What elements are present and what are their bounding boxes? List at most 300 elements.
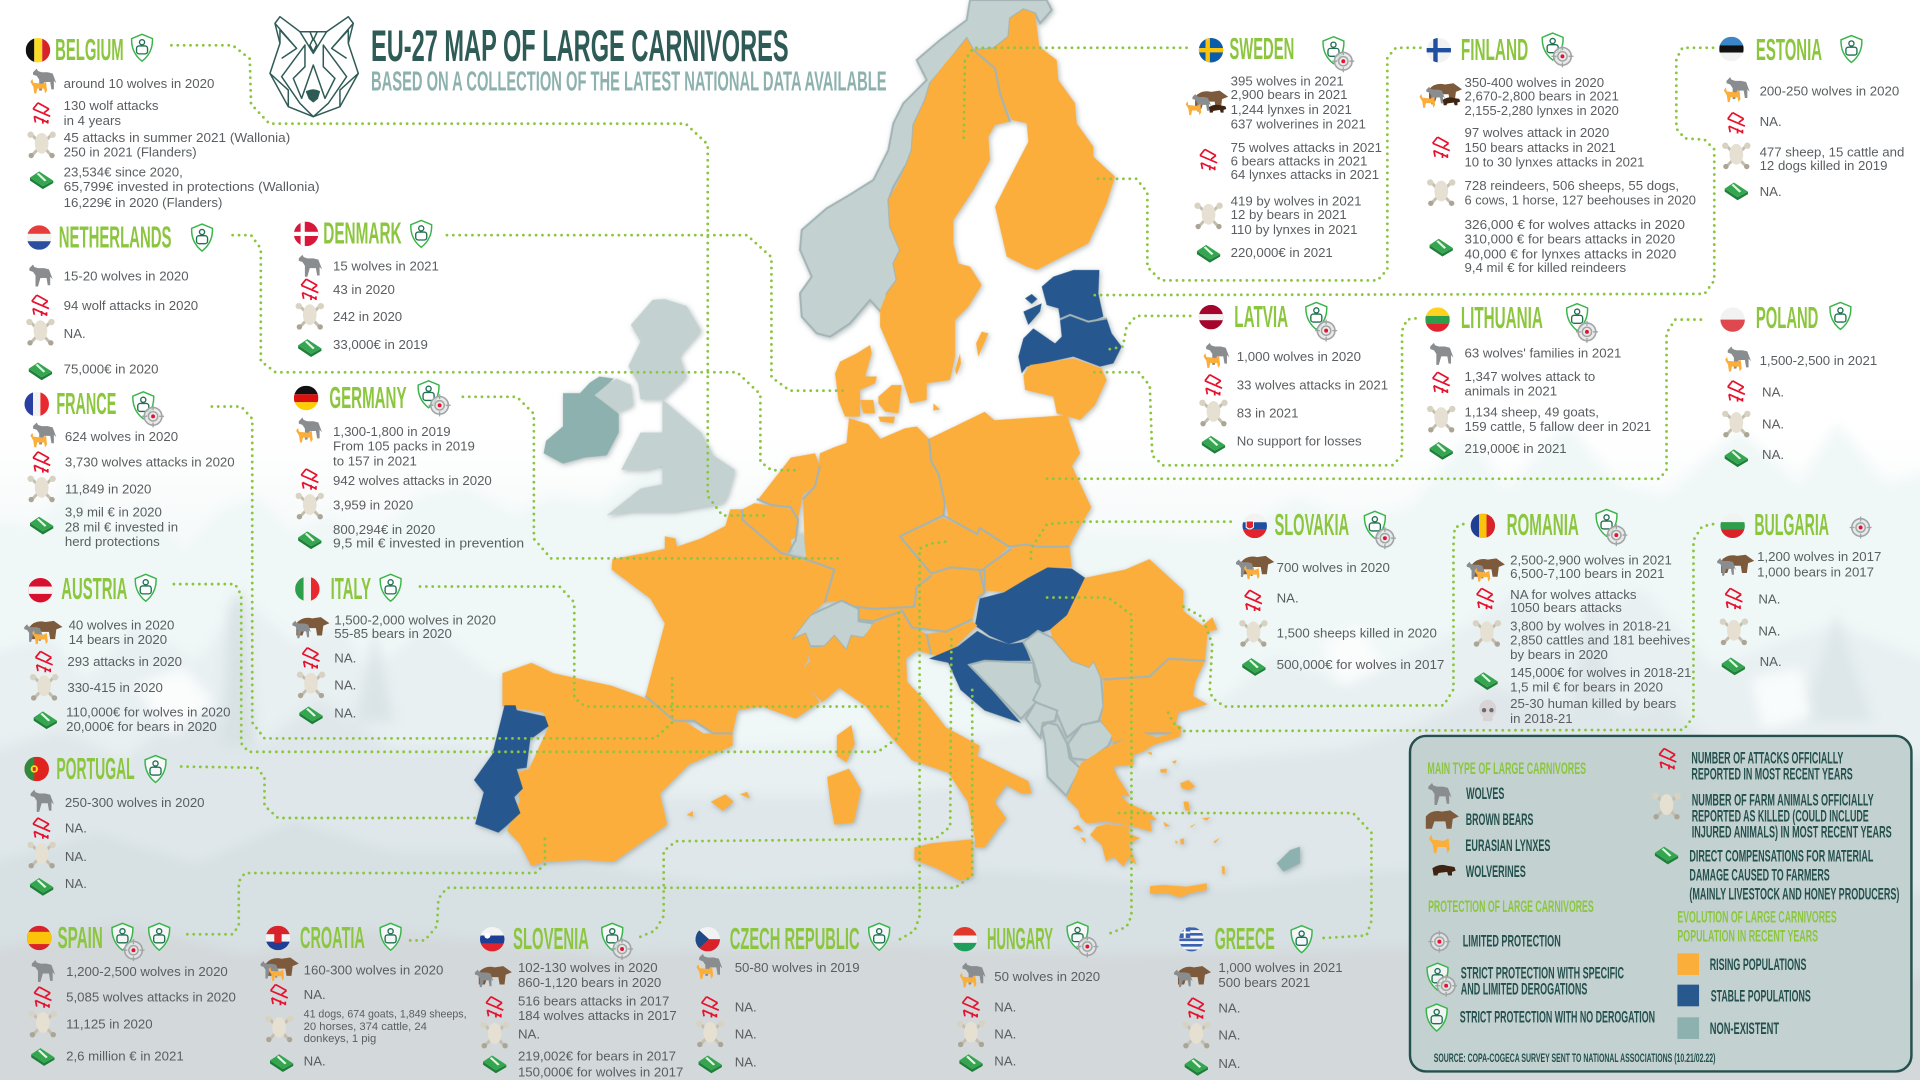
- compensation: NA.: [994, 1053, 1016, 1068]
- panel: Slovenia: SLOVENIA: [513, 922, 589, 956]
- killed animals: [30, 674, 163, 701]
- panel: Lithuania: [1425, 301, 1651, 460]
- panel: Spain: [27, 921, 236, 1066]
- panel: Latvia: LATVIA: [1234, 300, 1288, 334]
- compensation: NA.: [735, 1055, 757, 1070]
- wolves: to 157 in 2021: [333, 453, 417, 468]
- legend text: [1427, 750, 1899, 1065]
- compensation: 9,5 mil € invested in prevention: [333, 535, 524, 550]
- Spain: [502, 663, 750, 866]
- Portugal: [474, 705, 549, 833]
- killed animals: 159 cattle, 5 fallow deer in 2021: [1464, 419, 1651, 434]
- protection types: LIMITED PROTECTION: [1463, 933, 1561, 951]
- attacks: [1205, 375, 1388, 396]
- Estonia: [1023, 270, 1103, 325]
- wolves: [1724, 77, 1899, 102]
- flag: [24, 757, 49, 781]
- icon: strict protection: [1426, 1004, 1447, 1031]
- attacks: [1188, 998, 1240, 1019]
- carnivore types: WOLVERINES: [1466, 863, 1526, 881]
- attacks: 184 wolves attacks in 2017: [518, 1008, 677, 1023]
- panel: Portugal: [24, 752, 205, 896]
- wolves and bears: 55-85 bears in 2020: [334, 626, 452, 641]
- flag: [1720, 514, 1745, 538]
- killed animals: NA.: [334, 677, 356, 692]
- Serbia: [1023, 631, 1103, 737]
- Northern Ireland: [594, 379, 633, 412]
- flag: [294, 222, 318, 246]
- panel: Italy: [292, 572, 496, 724]
- attacks: 130 wolf attacks: [64, 98, 159, 113]
- killed animals: NA.: [994, 1026, 1016, 1041]
- wolves: [30, 422, 178, 447]
- attacks: 6 bears attacks in 2021: [1231, 153, 1367, 168]
- compensation: [270, 1053, 326, 1072]
- Ireland: [544, 377, 619, 464]
- protection: [1596, 509, 1627, 546]
- border: Sweden / Finland: [973, 50, 1010, 122]
- compensation: NA.: [65, 876, 87, 891]
- protection: [112, 923, 170, 961]
- icon: wolves: [1428, 783, 1452, 805]
- compensation: [1430, 441, 1567, 460]
- panel: Belgium: BELGIUM: [55, 33, 124, 67]
- wolves: [29, 264, 189, 287]
- killed animals: NA.: [1758, 624, 1780, 639]
- panel: Italy: ITALY: [331, 572, 371, 606]
- compensation: [1430, 217, 1685, 275]
- killed animals: NA.: [1218, 1028, 1240, 1043]
- attacks: 10 to 30 lynxes attacks in 2021: [1464, 155, 1644, 170]
- attacks: [702, 997, 757, 1018]
- France: [611, 509, 834, 733]
- logo: wolf head: [270, 17, 358, 117]
- wolves and bears: [1717, 549, 1881, 579]
- attacks: [1433, 369, 1595, 399]
- compensation: [31, 1048, 184, 1066]
- killed animals: [27, 842, 87, 868]
- compensation: 326,000 € for wolves attacks in 2020: [1464, 217, 1685, 232]
- Albania: [1042, 723, 1081, 796]
- panel: Poland: POLAND: [1756, 301, 1818, 335]
- killed animals: 45 attacks in summer 2021 (Wallonia): [64, 130, 290, 145]
- attacks: 94 wolf attacks in 2020: [64, 298, 198, 313]
- killed animals: [27, 476, 151, 502]
- protection: [602, 923, 633, 960]
- compensation: [30, 164, 320, 210]
- compensation: 800,294€ in 2020: [333, 522, 435, 537]
- protection: [1067, 922, 1098, 958]
- flag: [1720, 307, 1745, 332]
- compensation: 28 mil € invested in: [65, 519, 178, 534]
- Greece: [1067, 723, 1225, 897]
- protection types: [1428, 898, 1655, 1027]
- Switzerland: [791, 601, 873, 650]
- killed animals: donkeys, 1 pig: [304, 1033, 376, 1045]
- panel: Austria: [24, 572, 230, 734]
- killed animals: NA.: [64, 326, 86, 341]
- Slovakia: [980, 545, 1072, 592]
- killed animals: [297, 672, 356, 698]
- flag: [1471, 514, 1495, 538]
- panel: Estonia: ESTONIA: [1756, 33, 1822, 67]
- Lithuania: [1023, 358, 1107, 420]
- panel: Netherlands: [26, 220, 212, 380]
- killed animals: 6 cows, 1 horse, 127 beehouses in 2020: [1464, 192, 1696, 207]
- wolves and bears: 1,200 wolves in 2017: [1757, 549, 1881, 564]
- legend panel: [1410, 736, 1911, 1071]
- wolves: [32, 960, 228, 982]
- wolves: [296, 418, 475, 468]
- compensation: 65,799€ invested in protections (Wallonia): [64, 179, 320, 194]
- Czech Republic: [900, 518, 1009, 576]
- wolves and bears: [475, 960, 661, 990]
- panel: Romania: [1467, 508, 1691, 726]
- compensation: 16,229€ in 2020 (Flanders): [64, 195, 222, 210]
- wolves: 250-300 wolves in 2020: [65, 795, 205, 810]
- flag: [1242, 514, 1267, 538]
- compensation: No support for losses: [1237, 434, 1362, 449]
- wolves: 1,300-1,800 in 2019: [333, 424, 451, 439]
- killed animals: NA.: [518, 1026, 540, 1041]
- panel: Slovakia: SLOVAKIA: [1274, 508, 1349, 542]
- carnivore numbers: 2,900 bears in 2021: [1231, 87, 1347, 102]
- protection: [132, 34, 152, 61]
- attacks: NA.: [735, 999, 757, 1014]
- compensation: 219,000€ in 2021: [1464, 441, 1567, 456]
- carnivore numbers: 350-400 wolves in 2020: [1464, 75, 1604, 90]
- flag: [27, 926, 51, 950]
- compensation: [34, 704, 230, 734]
- wolves and bears: 860-1,120 bears in 2020: [518, 975, 661, 990]
- attacks: 942 wolves attacks in 2020: [333, 473, 492, 488]
- killed animals: 242 in 2020: [333, 309, 402, 324]
- protection types: STRICT PROTECTION WITH NO DEROGATION: [1460, 1009, 1655, 1027]
- Denmark: [835, 345, 940, 423]
- attacks: NA.: [65, 821, 87, 836]
- population evolution: RISING POPULATIONS: [1710, 956, 1806, 974]
- carnivore numbers: 395 wolves in 2021: [1231, 74, 1344, 89]
- compensation: 110,000€ for wolves in 2020: [66, 704, 230, 719]
- wolves and bears: 1,000 wolves in 2021: [1218, 960, 1343, 975]
- panel: Germany: GERMANY: [329, 381, 407, 415]
- panel: Lithuania: LITHUANIA: [1461, 301, 1543, 335]
- carnivore numbers: [1419, 75, 1619, 118]
- killed animals: 250 in 2021 (Flanders): [64, 145, 197, 160]
- compensation: NA.: [304, 1053, 326, 1068]
- panel: Greece: GREECE: [1215, 922, 1275, 956]
- attacks: [486, 993, 677, 1023]
- killed animals: 1,500 sheeps killed in 2020: [1277, 625, 1437, 640]
- wolves: 15 wolves in 2021: [333, 259, 439, 274]
- compensation: NA.: [1760, 184, 1782, 199]
- Sweden: [880, 38, 1010, 403]
- attacks: NA.: [1762, 385, 1784, 400]
- attacks: [1245, 590, 1299, 611]
- attacks: 75 wolves attacks in 2021: [1231, 140, 1382, 155]
- killed animals: [29, 1011, 153, 1037]
- killed animals: [1722, 411, 1784, 437]
- wolves: 63 wolves' families in 2021: [1464, 346, 1621, 361]
- flag: [696, 927, 720, 951]
- protection: [418, 381, 451, 416]
- compensation: [699, 1055, 757, 1073]
- icon: brown bears: [1426, 810, 1459, 829]
- compensation: NA.: [1760, 654, 1782, 669]
- wolves and bears: 500 bears 2021: [1218, 975, 1310, 990]
- panel: Bulgaria: BULGARIA: [1754, 508, 1829, 542]
- wolves and bears: [292, 612, 496, 641]
- protection: [1323, 37, 1354, 72]
- wolves: [1430, 343, 1621, 365]
- Bosnia: [969, 661, 1040, 719]
- compensation: [298, 522, 524, 550]
- attacks: 64 lynxes attacks in 2021: [1231, 167, 1379, 182]
- compensation: [29, 361, 159, 380]
- killed animals: NA.: [735, 1026, 757, 1041]
- attacks: NA.: [304, 987, 326, 1002]
- protection: [1830, 302, 1851, 329]
- carnivore numbers: [1186, 74, 1366, 132]
- country borders: [645, 439, 1205, 744]
- killed animals: [1427, 178, 1696, 207]
- compensation: 500,000€ for wolves in 2017: [1277, 657, 1444, 672]
- panel: Croatia: [261, 921, 467, 1072]
- panel: Slovenia: [475, 922, 683, 1079]
- carnivore types: [1427, 760, 1586, 881]
- attacks: NA.: [1758, 592, 1780, 607]
- protection: [411, 220, 432, 247]
- panel: Sweden: SWEDEN: [1229, 32, 1294, 66]
- protection: [192, 224, 212, 251]
- wolves: 1,500-2,500 in 2021: [1760, 353, 1877, 368]
- wolves and bears: 14 bears in 2020: [69, 632, 167, 647]
- killed animals: 83 in 2021: [1237, 406, 1298, 421]
- panel: Latvia: [1199, 300, 1388, 454]
- flag: [1719, 37, 1744, 61]
- compensation: [299, 706, 356, 724]
- attacks: [1728, 381, 1784, 402]
- wolves: 624 wolves in 2020: [65, 429, 178, 444]
- Poland: [929, 412, 1091, 549]
- attacks: [302, 648, 356, 669]
- wolves: [696, 954, 860, 979]
- Great Britain: [607, 299, 735, 516]
- wolves: 200-250 wolves in 2020: [1760, 84, 1899, 99]
- protection: [869, 923, 890, 950]
- attacks: [301, 469, 492, 490]
- panel: Finland: [1419, 33, 1696, 275]
- wolves: [30, 69, 214, 94]
- killed animals: [26, 319, 86, 346]
- protection: [1542, 33, 1573, 67]
- protection: [1850, 516, 1872, 539]
- killed animals: [1473, 619, 1691, 662]
- attacks: NA.: [994, 999, 1016, 1014]
- icon: killed animals: [1652, 793, 1681, 819]
- protection types: PROTECTION OF LARGE CARNIVORES: [1428, 898, 1594, 916]
- wolves: 1,200-2,500 wolves in 2020: [66, 964, 228, 979]
- compensation: [30, 876, 87, 896]
- panel: Greece: [1174, 922, 1343, 1076]
- attacks: 33 wolves attacks in 2021: [1237, 377, 1388, 392]
- killed animals: [1720, 618, 1780, 645]
- compensation: [298, 337, 428, 357]
- Belgium: [742, 503, 798, 553]
- panel: Spain: SPAIN: [58, 921, 103, 955]
- wolves and bears: 160-300 wolves in 2020: [304, 963, 443, 978]
- North Macedonia: [1068, 721, 1113, 760]
- compensation: 219,002€ for bears in 2017: [518, 1048, 676, 1063]
- icon: attacks: [1659, 749, 1676, 769]
- flag: [1199, 305, 1223, 329]
- Finland: [975, 9, 1115, 270]
- killed animals: 11,849 in 2020: [65, 481, 151, 496]
- wolves: [31, 790, 205, 812]
- killed animals: 330-415 in 2020: [67, 680, 163, 695]
- panel: Czech Republic: [696, 922, 890, 1073]
- wolves and bears: 1,000 bears in 2017: [1757, 564, 1874, 579]
- panel: Croatia: CROATIA: [300, 921, 365, 955]
- killed animals: 3,800 by wolves in 2018-21: [1510, 619, 1671, 634]
- wolves: 1,000 wolves in 2020: [1237, 349, 1361, 364]
- attacks: [33, 818, 87, 839]
- protection: [1841, 36, 1862, 62]
- carnivore types: EURASIAN LYNXES: [1465, 837, 1550, 855]
- attacks: 5,085 wolves attacks in 2020: [66, 990, 236, 1005]
- attacks: 43 in 2020: [333, 282, 395, 297]
- killed animals: 110 by lynxes in 2021: [1231, 222, 1358, 237]
- protection: [1364, 511, 1396, 549]
- killed animals: 419 by wolves in 2021: [1231, 194, 1361, 209]
- killed animals: NA.: [65, 849, 87, 864]
- panel: Austria: AUSTRIA: [61, 572, 127, 606]
- icon: skull: [1479, 700, 1496, 721]
- protection: [135, 574, 156, 601]
- attacks: [1477, 587, 1637, 615]
- panel: France: [24, 387, 235, 549]
- wolves: [1236, 556, 1390, 579]
- panel: Romania: ROMANIA: [1507, 508, 1579, 542]
- killed animals: [1722, 143, 1904, 173]
- attacks: [1433, 125, 1644, 170]
- Austria: [859, 567, 985, 632]
- wolves: around 10 wolves in 2020: [64, 76, 214, 91]
- wolves: 50 wolves in 2020: [994, 969, 1100, 984]
- carnivore numbers: 2,155-2,280 lynxes in 2020: [1464, 103, 1619, 118]
- attacks: 1050 bears attacks: [1510, 600, 1622, 615]
- panel: Hungary: [953, 922, 1100, 1072]
- attacks: 516 bears attacks in 2017: [518, 993, 669, 1008]
- killed animals: 41 dogs, 674 goats, 1,849 sheeps,: [304, 1009, 467, 1021]
- attacks: 1,347 wolves attack to: [1464, 369, 1595, 384]
- compensation: NA.: [334, 706, 356, 721]
- wolves: 700 wolves in 2020: [1277, 560, 1390, 575]
- carnivore types: BROWN BEARS: [1466, 811, 1533, 829]
- compensation: [1474, 665, 1691, 694]
- protection: [1567, 304, 1598, 343]
- carnivore numbers: 637 wolverines in 2021: [1231, 117, 1366, 132]
- icon: strict protection with derogations: [1427, 963, 1457, 997]
- killed animals: [957, 1020, 1016, 1047]
- killed animals: [1182, 1022, 1240, 1048]
- Cyprus: [1277, 847, 1300, 872]
- attacks: [1728, 113, 1782, 133]
- protection types: AND LIMITED DEROGATIONS: [1461, 981, 1587, 999]
- wolves and bears: [1174, 960, 1343, 990]
- killed animals: NA.: [1762, 417, 1784, 432]
- attacks note: [1691, 750, 1853, 784]
- killed animals: 728 reindeers, 506 sheeps, 55 dogs,: [1464, 178, 1679, 193]
- compensation: [959, 1053, 1016, 1072]
- border: Baltic states: [1060, 315, 1107, 322]
- killed animals: 20 horses, 374 cattle, 24: [304, 1021, 427, 1033]
- compensation: 145,000€ for wolves in 2018-21: [1510, 665, 1691, 680]
- wolves: 50-80 wolves in 2019: [735, 960, 860, 975]
- compensation: herd protections: [65, 534, 160, 549]
- panel: Denmark: [294, 217, 439, 357]
- icon: wolverines: [1432, 865, 1456, 876]
- killed animals: 2,850 cattles and 181 beehives: [1510, 633, 1691, 648]
- Montenegro: [1026, 702, 1057, 737]
- attacks: [34, 987, 236, 1008]
- icon: lynxes: [1429, 835, 1450, 853]
- icon: limited protection: [1428, 931, 1450, 953]
- killed animals: [27, 130, 290, 160]
- panel: Germany: [294, 381, 524, 550]
- killed animals: 12 dogs killed in 2019: [1760, 158, 1887, 173]
- flag: [1425, 307, 1450, 332]
- Italy: [803, 611, 1032, 881]
- Netherlands: [757, 453, 820, 520]
- compensation: 150,000€ for wolves in 2017: [518, 1064, 683, 1079]
- attacks: in 4 years: [64, 113, 121, 128]
- wolves and bears: [261, 958, 443, 981]
- attacks: NA.: [1760, 114, 1782, 129]
- killed animals: [1194, 194, 1361, 237]
- compensation: [1725, 182, 1782, 200]
- Romania: [1050, 559, 1217, 679]
- attacks: NA.: [1277, 590, 1299, 605]
- protection: [1306, 302, 1337, 342]
- wolves and bears: [24, 617, 174, 647]
- carnivore types: WOLVES: [1466, 785, 1504, 803]
- compensation: [1242, 657, 1444, 676]
- attacks: [301, 279, 395, 300]
- compensation: 23,534€ since 2020,: [64, 164, 183, 179]
- Luxembourg: [791, 532, 806, 557]
- wolves and bears: 102-130 wolves in 2020: [518, 960, 658, 975]
- compensation: NA.: [1218, 1056, 1240, 1071]
- protection: [380, 923, 401, 950]
- attacks: [1200, 140, 1382, 182]
- flag: [1179, 927, 1204, 951]
- compensation: [30, 505, 178, 549]
- compensation: [1185, 1056, 1240, 1076]
- panel: Portugal: PORTUGAL: [56, 752, 135, 786]
- attacks: [36, 651, 182, 672]
- flag: [1427, 38, 1451, 62]
- carnivore numbers: 1,244 lynxes in 2021: [1231, 102, 1352, 117]
- killed animals: 11,125 in 2020: [66, 1017, 153, 1032]
- Norway: [800, 0, 1052, 337]
- protection: [145, 756, 166, 782]
- Latvia: [1018, 315, 1122, 373]
- heading: DENMARK: [323, 217, 402, 251]
- attacks: NA.: [1218, 1001, 1240, 1016]
- attacks: [33, 452, 235, 473]
- icon: compensation: [1655, 847, 1678, 864]
